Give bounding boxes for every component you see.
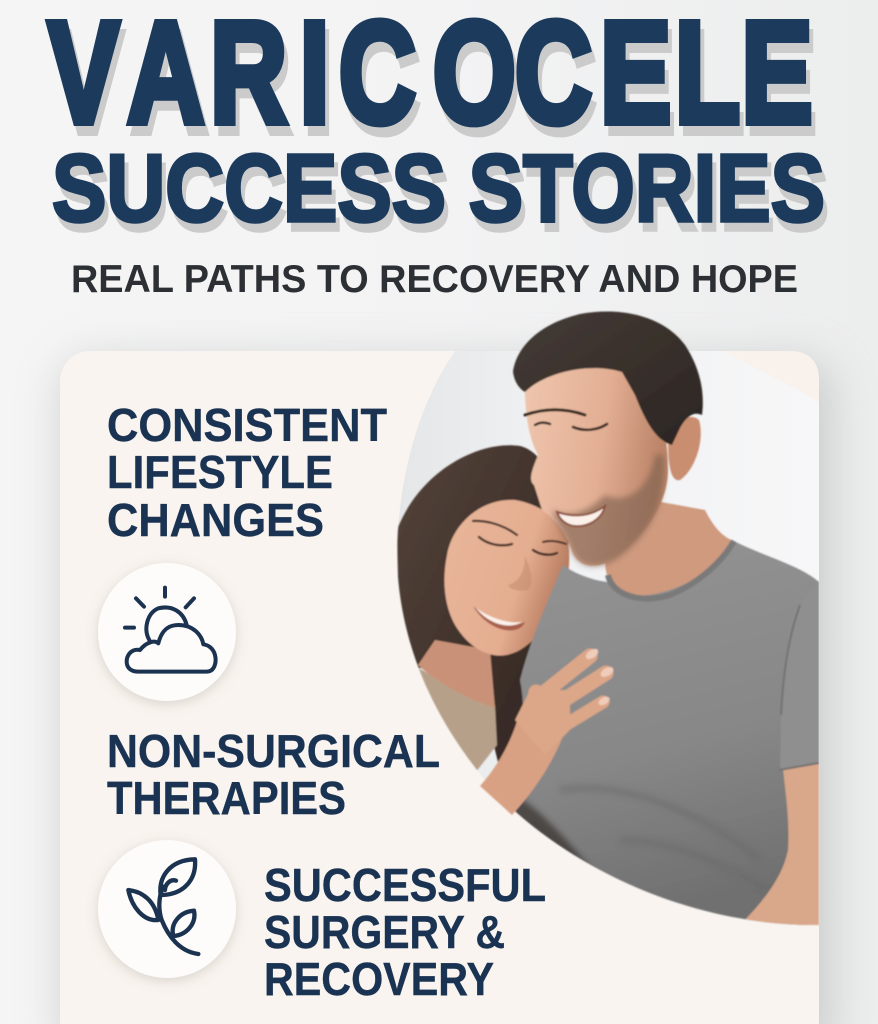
man's forearm bbox=[745, 763, 819, 926]
man's ear bbox=[668, 417, 701, 480]
woman's arm bbox=[480, 718, 566, 815]
text: Consistent Lifestyle Changes bbox=[107, 399, 387, 546]
photo background wall bbox=[397, 351, 819, 780]
man's neck bbox=[605, 500, 734, 596]
icon: sun and cloud bbox=[98, 563, 236, 701]
fingernail highlights bbox=[584, 647, 615, 707]
man bbox=[480, 312, 819, 940]
woman's neck bbox=[418, 640, 495, 708]
woman's brows and eyes bbox=[473, 521, 566, 555]
woman's face bbox=[444, 500, 569, 656]
text: Non-Surgical Therapies: THERAPIES bbox=[107, 772, 346, 824]
palm bbox=[514, 689, 571, 738]
man's brows and eyes bbox=[525, 410, 607, 430]
man's sleeve bbox=[780, 715, 819, 768]
card shadow bbox=[62, 360, 832, 1024]
text: Successful Surgery and Recovery: RECOVERY bbox=[264, 953, 494, 1005]
shirt folds bbox=[562, 786, 710, 842]
man's hair bbox=[513, 312, 703, 445]
woman's back hair bbox=[396, 444, 569, 762]
text: Non-Surgical Therapies bbox=[107, 725, 440, 824]
man's smile bbox=[557, 506, 605, 526]
text: Successful Surgery and Recovery: SURGERY & bbox=[264, 906, 505, 958]
man's collar bbox=[608, 541, 734, 598]
text: Non-Surgical Therapies: NON-SURGICAL bbox=[107, 725, 440, 777]
panel: content card bbox=[60, 351, 819, 1024]
subtitle: REAL PATHS TO RECOVERY AND HOPE bbox=[71, 258, 798, 301]
woman's smile bbox=[473, 606, 525, 630]
photo: smiling couple bbox=[397, 312, 819, 940]
woman bbox=[397, 445, 570, 800]
text: Consistent Lifestyle Changes: LIFESTYLE bbox=[107, 446, 333, 498]
man's beard bbox=[552, 455, 665, 566]
woman's nose shadow bbox=[508, 558, 531, 590]
text: Consistent Lifestyle Changes: CHANGES bbox=[107, 494, 324, 546]
man's face bbox=[525, 355, 668, 566]
text: Successful Surgery and Recovery bbox=[264, 859, 546, 1005]
title: Varicocele: VARICOCELE bbox=[52, 1, 817, 163]
wall highlight in the top corner bbox=[722, 351, 819, 402]
text: Successful Surgery and Recovery: SUCCESSFUL bbox=[264, 859, 546, 911]
woman's hand on chest bbox=[530, 656, 606, 733]
man's shirt bbox=[500, 540, 819, 940]
woman's top bbox=[418, 668, 498, 770]
shirt shadow near the arm bbox=[515, 799, 590, 864]
text: Consistent Lifestyle Changes: CONSISTENT bbox=[107, 399, 387, 451]
icon: leafy sprig bbox=[98, 840, 236, 978]
